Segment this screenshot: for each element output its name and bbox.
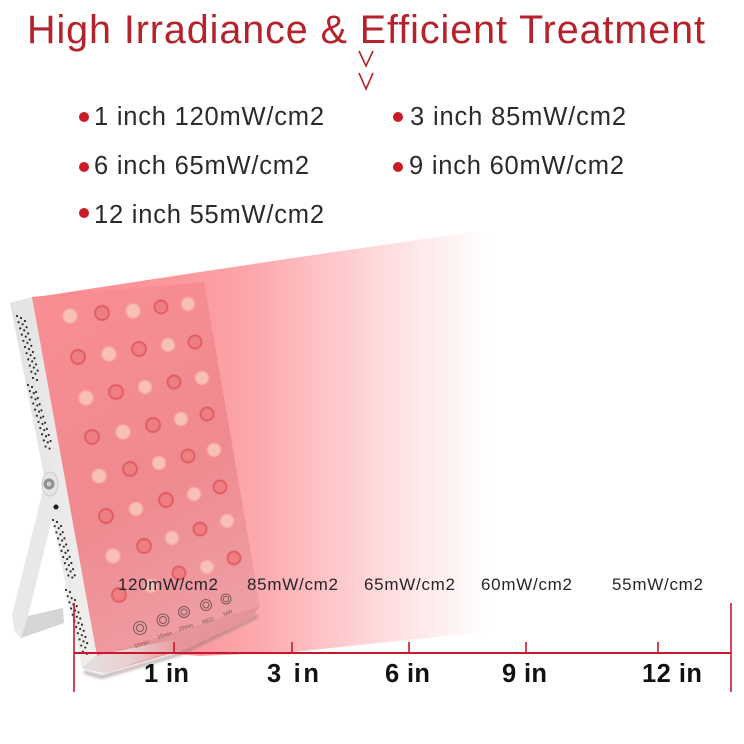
button labels: NIR [223,609,234,618]
control buttons [134,594,231,634]
icon: double chevron arrow [359,51,373,89]
list item: 9 inch: 9 inch 60mW/cm2 [409,152,624,180]
distance labels [144,660,702,688]
button labels: 15min [157,631,173,641]
device face [32,282,260,656]
button labels [134,609,234,650]
distance labels: 1 in [144,660,189,688]
irradiance list [79,103,626,229]
list item: 12 inch: 12 inch 55mW/cm2 [94,201,324,229]
side vent holes [17,316,88,654]
irradiance value labels: 85mW/cm2 [247,575,338,594]
stand hinge and bolt [42,472,58,510]
device bottom lip [82,640,174,673]
button labels: 10min [134,640,150,650]
button labels: 20min [178,623,194,633]
button labels: RED [202,617,215,626]
irradiance value labels: 120mW/cm2 [118,575,218,594]
irradiance value labels [118,575,703,594]
title: High Irradiance & Efficient Treatment [27,8,705,52]
distance labels: 12 in [642,660,702,688]
device shadow [84,616,258,677]
list item: 6 inch: 6 inch 65mW/cm2 [94,152,309,180]
distance axis [74,603,731,692]
list item: 3 inch: 3 inch 85mW/cm2 [410,103,626,131]
distance labels: 6 in [385,660,430,688]
LED array [63,298,240,602]
distance labels: 9 in [502,660,547,688]
irradiance value labels: 65mW/cm2 [364,575,455,594]
device stand [12,490,64,638]
list item: 1 inch: 1 inch 120mW/cm2 [94,103,324,131]
distance labels: 3 in [267,660,319,688]
irradiance value labels: 60mW/cm2 [481,575,572,594]
irradiance value labels: 55mW/cm2 [612,575,703,594]
device underside [82,606,260,673]
light beam [30,232,492,656]
device side edge [10,297,97,668]
device: red light panel [10,282,260,677]
